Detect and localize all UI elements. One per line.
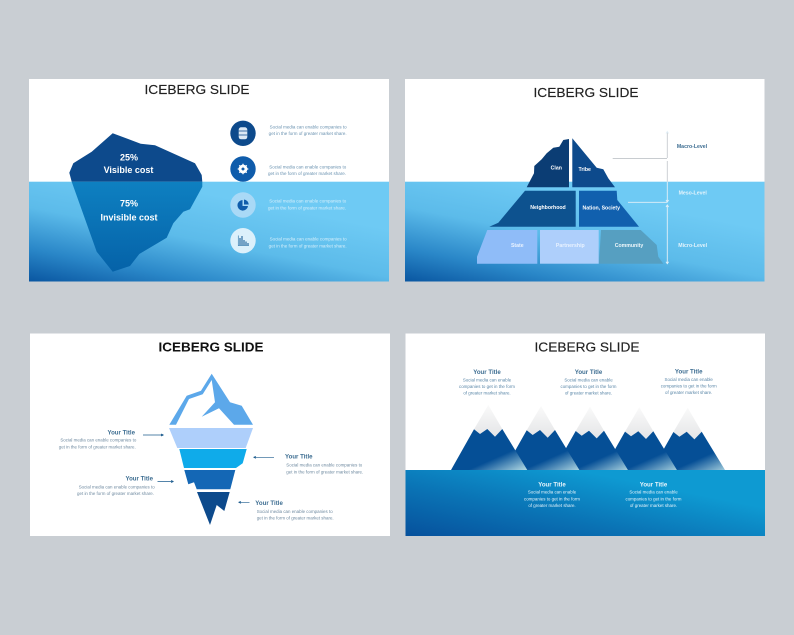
label: Nation, Society: Nation, Society (583, 205, 620, 211)
title: bottom-left slide: ICEBERG SLIDE (158, 340, 264, 354)
text block: item 1: get in the form of greater market share. (269, 131, 347, 136)
icon: bar chart (230, 228, 256, 253)
text block: band 4: Your Title (255, 500, 283, 507)
text block: above water 3: of greater market share. (665, 390, 712, 395)
label: Clan: Clan (551, 166, 562, 172)
label: Tribe: Tribe (578, 167, 591, 173)
text block: band 2: Your Title (285, 454, 313, 461)
text block: above water 2: of greater market share. (565, 391, 612, 396)
text block: item 2: Social media can enable companies to (269, 164, 347, 169)
label: visible cost: 25% (120, 152, 138, 162)
segment: State (477, 230, 537, 264)
title: top-left slide: ICEBERG SLIDE (144, 82, 250, 97)
text block: band 1: Your Title (107, 430, 136, 437)
arrow: band 4 (238, 501, 250, 503)
mountain 3 (553, 407, 629, 472)
text block: band 2: get in the form of greater market share. (286, 469, 363, 474)
arrow: band 2 (254, 456, 274, 458)
text block: band 1: get in the form of greater market share. (59, 444, 136, 449)
text block: band 1 (59, 430, 137, 449)
iceberg band 2 (179, 449, 247, 468)
panel: top-left iceberg cost slide (29, 79, 389, 282)
text block: band 4 (255, 500, 334, 521)
segment: Neighborhood (489, 191, 576, 227)
text block: below water 1: companies to get in the form (524, 496, 580, 501)
label: Macro-Level: Macro-Level (677, 144, 708, 150)
text block: band 3: get in the form of greater market share. (77, 491, 154, 496)
text block: above water 3: Your Title (675, 368, 703, 375)
icon: gear (230, 156, 256, 182)
mountain 4 (602, 407, 678, 472)
label: State: State (511, 243, 524, 249)
text block: band 3: Social media can enable companies to (79, 484, 155, 489)
level brackets and arrows (613, 132, 669, 264)
text block: above water 3: Social media can enable (665, 377, 713, 382)
text block: below water 2: Social media can enable (629, 490, 678, 495)
text block: item 4: Social media can enable companies to (270, 237, 347, 242)
panel: bottom-right mountain slide (406, 334, 765, 536)
title: bottom-right slide: ICEBERG SLIDE (534, 340, 640, 354)
text block: below water 2: Your Title (640, 481, 668, 488)
label: Community: Community (615, 243, 643, 249)
text block: item 1 (269, 124, 347, 136)
label: Meso-Level: Meso-Level (679, 190, 707, 196)
panel: bottom-left layered iceberg slide (30, 334, 390, 536)
mountains row (451, 405, 727, 473)
water (406, 470, 765, 536)
text block: item 3: get in the form of greater market share. (268, 205, 346, 210)
text block: band 4: get in the form of greater market share. (257, 516, 334, 521)
text block: below water 1: of greater market share. (528, 503, 576, 508)
text block: item 3 (268, 199, 347, 210)
label: Neighborhood: Neighborhood (530, 205, 566, 211)
icon: database (230, 121, 256, 146)
label: Micro-Level: Micro-Level (678, 243, 708, 249)
text block: item 3: Social media can enable companies to (269, 199, 347, 204)
text block: above water 2: companies to get in the form (560, 384, 617, 389)
text block: below water 1: Social media can enable (528, 490, 577, 495)
text block: above water 3: companies to get in the form (661, 384, 717, 388)
icon: pie chart (230, 192, 256, 218)
segment: Clan (527, 139, 569, 187)
text block: item 2: get in the form of greater market share. (268, 171, 346, 176)
text block: band 3: Your Title (125, 476, 154, 483)
text block: band 1: Social media can enable companies to (60, 438, 137, 443)
label: invisible cost: 75% (120, 198, 138, 208)
mountain 1 (451, 405, 527, 470)
text block: above water 3 (661, 368, 717, 395)
text block: above water 2: Your Title (575, 369, 603, 376)
text block: band 3 (77, 476, 155, 496)
text block: band 4: Social media can enable companies to (257, 509, 333, 514)
iceberg band 3 (184, 470, 235, 489)
segment: Tribe (572, 138, 615, 187)
text block: item 2 (268, 164, 347, 176)
text block: below water 1: Your Title (538, 481, 566, 488)
text block: above water 1 (459, 369, 515, 396)
text block: above water 2: Social media can enable (564, 378, 613, 382)
segment: Community (599, 230, 663, 264)
iceberg: visible and invisible parts (69, 133, 202, 272)
segment: Nation, Society (579, 191, 639, 227)
mountain 5 (650, 408, 727, 473)
text block: item 4: get in the form of greater market share. (269, 243, 347, 248)
text block: above water 1: Social media can enable (463, 378, 512, 382)
iceberg tip outline (169, 374, 253, 425)
label: visible cost caption: Visible cost (104, 165, 153, 175)
text block: below water 1 (524, 481, 580, 508)
iceberg band 1 (169, 428, 253, 448)
arrow: band 1 (143, 434, 164, 436)
text block: above water 1: of greater market share. (463, 391, 511, 396)
label: invisible cost caption: Invisible cost (100, 212, 158, 222)
panel: top-right pyramid slide (405, 79, 764, 282)
mountain 2 (504, 406, 580, 471)
text block: below water 2 (626, 481, 682, 508)
text block: item 1: Social media can enable companies to (270, 124, 347, 129)
text block: above water 2 (560, 369, 617, 396)
text block: below water 2: companies to get in the form (626, 496, 682, 501)
segment: Partnership (540, 230, 599, 264)
text block: below water 2: of greater market share. (630, 503, 677, 508)
text block: above water 1: companies to get in the form (459, 384, 515, 389)
text block: item 4 (269, 237, 347, 248)
text block: band 2: Social media can enable companies to (286, 463, 363, 468)
label: Partnership: Partnership (556, 243, 585, 249)
text block: above water 1: Your Title (473, 369, 501, 376)
arrow: band 3 (158, 480, 174, 482)
title: top-right slide: ICEBERG SLIDE (534, 85, 639, 100)
iceberg band 4 (197, 492, 230, 525)
text block: band 2 (285, 454, 363, 474)
